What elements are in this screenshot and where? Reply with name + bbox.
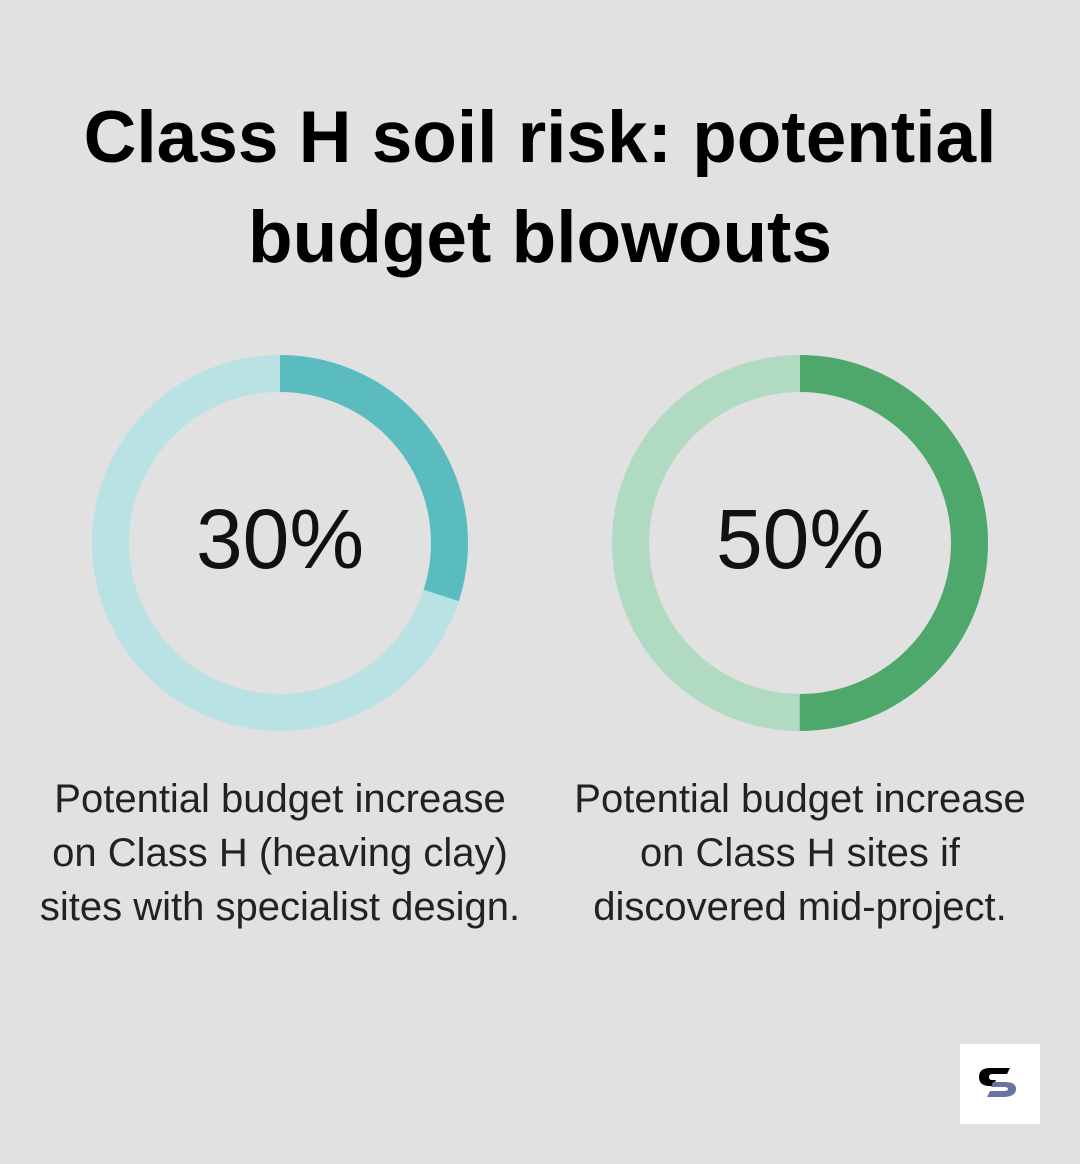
stat: 50%: 50% [716,492,884,586]
logo [960,1044,1040,1124]
caption left: sites with specialist design. [40,885,520,929]
title [84,97,996,278]
caption left [40,777,520,929]
caption left: on Class H (heaving clay) [52,831,508,875]
caption right: on Class H sites if [640,831,960,875]
donut chart: 50% [612,355,988,731]
title: Class H soil risk: potential [84,97,996,178]
title: budget blowouts [248,197,832,278]
caption left: Potential budget increase [54,777,506,821]
caption right: discovered mid-project. [593,885,1007,929]
stat: 30%: 30% [196,492,364,586]
caption right: Potential budget increase [574,777,1026,821]
caption right [574,777,1026,929]
donut chart: 30% [92,355,468,731]
